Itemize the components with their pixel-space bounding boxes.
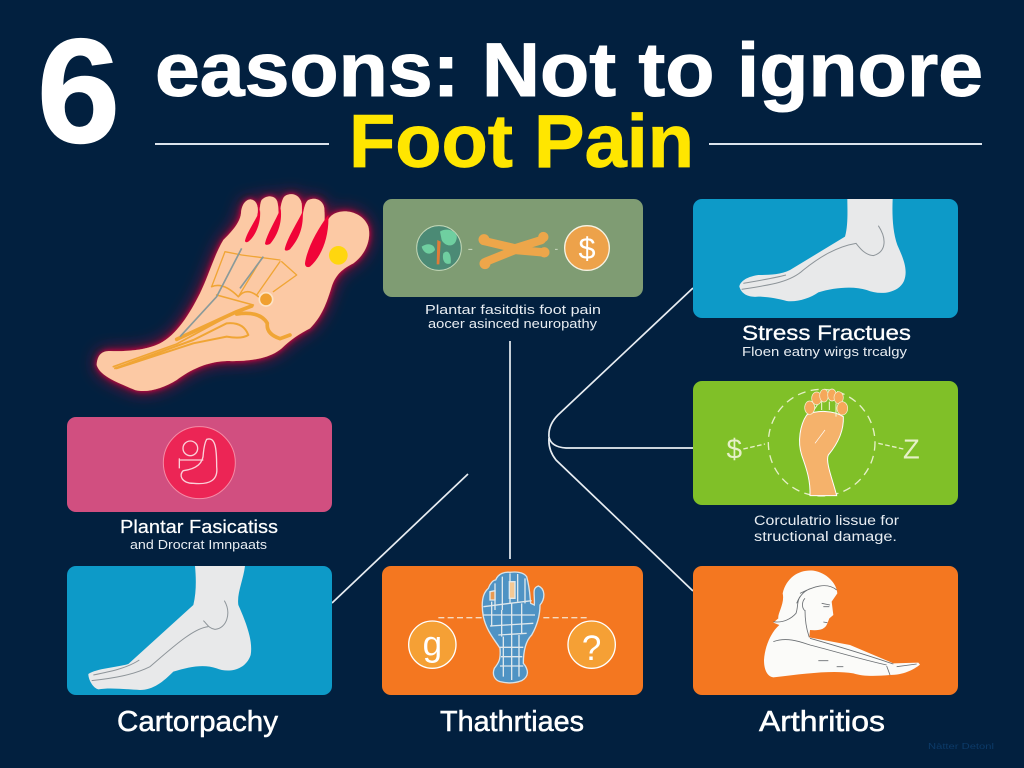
icon: foot sole: [800, 389, 848, 496]
big number 6: 6: [37, 9, 120, 174]
heading line 2: Foot Pain: [349, 99, 694, 183]
yellow pain point: [329, 246, 348, 265]
faint watermark: Nàtter Detonl: [928, 742, 994, 751]
icon: orange forked bone: [479, 232, 549, 269]
red pain areas between toes: [245, 208, 328, 267]
icon: blue skeletal hand: [482, 572, 544, 683]
connector lines: [332, 288, 693, 603]
person illustration: [764, 571, 920, 677]
foot illustration: [88, 566, 251, 690]
caption: Floen eatny wirgs trcalgy: [742, 344, 908, 359]
panel: thathrtiaes: [382, 566, 643, 738]
panel: arthritios: [693, 566, 958, 738]
caption: Corculatrio lissue for: [754, 513, 900, 528]
title: [37, 9, 983, 183]
dollar symbol: $: [727, 433, 743, 464]
icon: dollar circle: [565, 226, 609, 270]
foot illustration: [739, 199, 906, 301]
icon: letter g circle: [409, 621, 456, 668]
label: Arthritios: [759, 706, 885, 738]
panel: plantar fasciitis: [67, 417, 332, 552]
heading: Plantar Fasicatiss: [120, 517, 278, 537]
label: Cartorpachy: [117, 706, 278, 738]
caption: Plantar fasitdtis foot pain: [425, 302, 601, 317]
icon: question mark circle: ?: [582, 629, 601, 668]
foot outline with red glow: [97, 194, 369, 391]
panel: plantar fasciitis neuropathy: aocer asinced neuropathy: [428, 316, 598, 331]
icon: red circle with foot outline: [163, 427, 235, 499]
bones and tendons: [113, 252, 297, 368]
caption: and Drocrat Imnpaats: [130, 538, 267, 552]
panel: circulation issue: structional damage.: [754, 529, 897, 544]
icon: question mark circle: [568, 621, 615, 668]
foot anatomy illustration: [97, 194, 369, 391]
icon: letter g circle: g: [423, 624, 442, 663]
panel: stress fractures: [693, 199, 958, 359]
dashed circle: [768, 389, 875, 496]
Z symbol: Z: [903, 434, 920, 465]
icon: nerve globe: [417, 226, 461, 270]
heading line 1: easons: Not to ignore: [155, 28, 983, 113]
heading: Stress Fractues: [742, 322, 911, 345]
panel: circulation issue: [693, 381, 958, 544]
panel: cartorpachy: [67, 566, 332, 738]
panel: plantar fasciitis neuropathy: [383, 199, 643, 331]
icon: dollar circle: $: [578, 232, 596, 266]
label: Thathrtiaes: [440, 706, 584, 738]
